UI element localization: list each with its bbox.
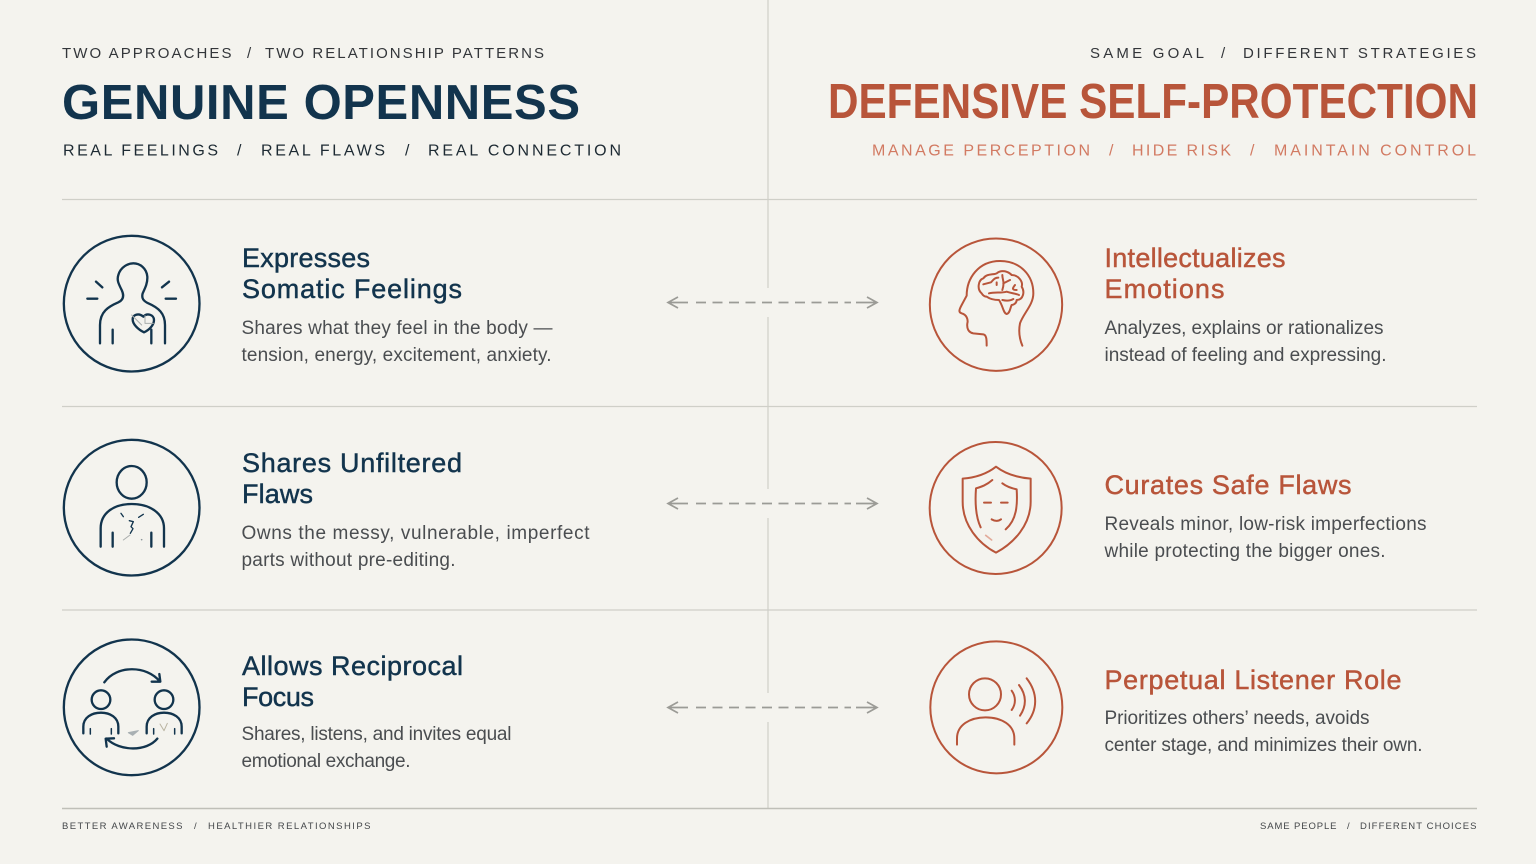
text: expresses somatic feelings: Somatic Feelings: [242, 274, 462, 304]
left kicker: /: [247, 45, 252, 62]
left header: [62, 45, 621, 160]
text: curates safe flaws: while protecting the bigger ones.: [1104, 541, 1386, 562]
icon: head with brain: [930, 238, 1062, 371]
text: intellectualizes emotions: [1104, 243, 1386, 366]
text: allows reciprocal focus: Focus: [242, 682, 314, 712]
right kicker: [1090, 45, 1476, 62]
left subtitle: REAL CONNECTION: [428, 142, 621, 160]
text: allows reciprocal focus: emotional exchange.: [242, 751, 410, 772]
right subtitle: HIDE RISK: [1132, 142, 1231, 160]
text: shares unfiltered flaws: parts without pre-editing.: [242, 550, 456, 571]
left kicker: [62, 45, 544, 62]
text: intellectualizes emotions: Analyzes, explains or rationalizes: [1104, 318, 1384, 339]
text: perpetual listener role: center stage, and minimizes their own.: [1104, 735, 1422, 756]
arrow: row 3: [668, 702, 877, 713]
left subtitle: [63, 142, 621, 160]
right subtitle: MAINTAIN CONTROL: [1274, 142, 1476, 160]
right subtitle: /: [1109, 142, 1114, 160]
title: genuine openness: GENUINE OPENNESS: [62, 76, 580, 130]
arrow: row 1: [668, 297, 877, 308]
right subtitle: [872, 142, 1476, 160]
icon: two people exchange: [64, 639, 199, 775]
text: expresses somatic feelings: Shares what they feel in the body —: [242, 318, 552, 339]
text: shares unfiltered flaws: [242, 448, 590, 571]
left subtitle: /: [405, 142, 410, 160]
left kicker: TWO APPROACHES: [62, 45, 232, 62]
footer right: SAME PEOPLE: [1260, 821, 1336, 832]
right kicker: SAME GOAL: [1090, 45, 1204, 62]
text: curates safe flaws: [1104, 470, 1426, 562]
text: intellectualizes emotions: Emotions: [1104, 274, 1224, 304]
text: perpetual listener role: [1104, 665, 1422, 756]
text: intellectualizes emotions: Intellectualizes: [1104, 243, 1286, 273]
footer left: HEALTHIER RELATIONSHIPS: [208, 821, 370, 832]
left subtitle: REAL FLAWS: [261, 142, 385, 160]
right subtitle: /: [1250, 142, 1255, 160]
icon: shield with face: [930, 442, 1062, 574]
right kicker: /: [1221, 45, 1226, 62]
text: shares unfiltered flaws: Owns the messy, vulnerable, imperfect: [242, 523, 590, 544]
icon: body with heart: [64, 236, 199, 371]
text: curates safe flaws: Reveals minor, low-risk imperfections: [1104, 514, 1426, 535]
footer right: /: [1347, 821, 1350, 832]
arrow: row 2: [668, 498, 877, 509]
footer left: BETTER AWARENESS: [62, 821, 182, 832]
text: perpetual listener role: Prioritizes others’ needs, avoids: [1104, 708, 1370, 729]
text: perpetual listener role: Perpetual Listener Role: [1104, 665, 1402, 695]
text: shares unfiltered flaws: Flaws: [242, 479, 313, 509]
text: expresses somatic feelings: Expresses: [242, 243, 370, 273]
text: allows reciprocal focus: Allows Reciprocal: [242, 651, 463, 681]
text: expresses somatic feelings: [242, 243, 552, 366]
footer right: [1260, 821, 1476, 832]
left subtitle: /: [237, 142, 242, 160]
text: allows reciprocal focus: [242, 651, 512, 772]
footer left: /: [194, 821, 197, 832]
text: shares unfiltered flaws: Shares Unfiltered: [242, 448, 462, 478]
right kicker: DIFFERENT STRATEGIES: [1243, 45, 1476, 62]
right subtitle: MANAGE PERCEPTION: [872, 142, 1090, 160]
left subtitle: REAL FEELINGS: [63, 142, 218, 160]
icon: person with cracks: [64, 440, 199, 575]
left kicker: TWO RELATIONSHIP PATTERNS: [265, 45, 544, 62]
text: expresses somatic feelings: tension, energy, excitement, anxiety.: [242, 345, 552, 366]
footer right: DIFFERENT CHOICES: [1360, 821, 1476, 832]
text: intellectualizes emotions: instead of feeling and expressing.: [1104, 345, 1386, 366]
icon: person with sound waves: [930, 641, 1062, 773]
text: allows reciprocal focus: Shares, listens, and invites equal: [242, 724, 512, 745]
text: curates safe flaws: Curates Safe Flaws: [1104, 470, 1352, 500]
footer left: [62, 821, 370, 832]
right header: [828, 45, 1478, 160]
